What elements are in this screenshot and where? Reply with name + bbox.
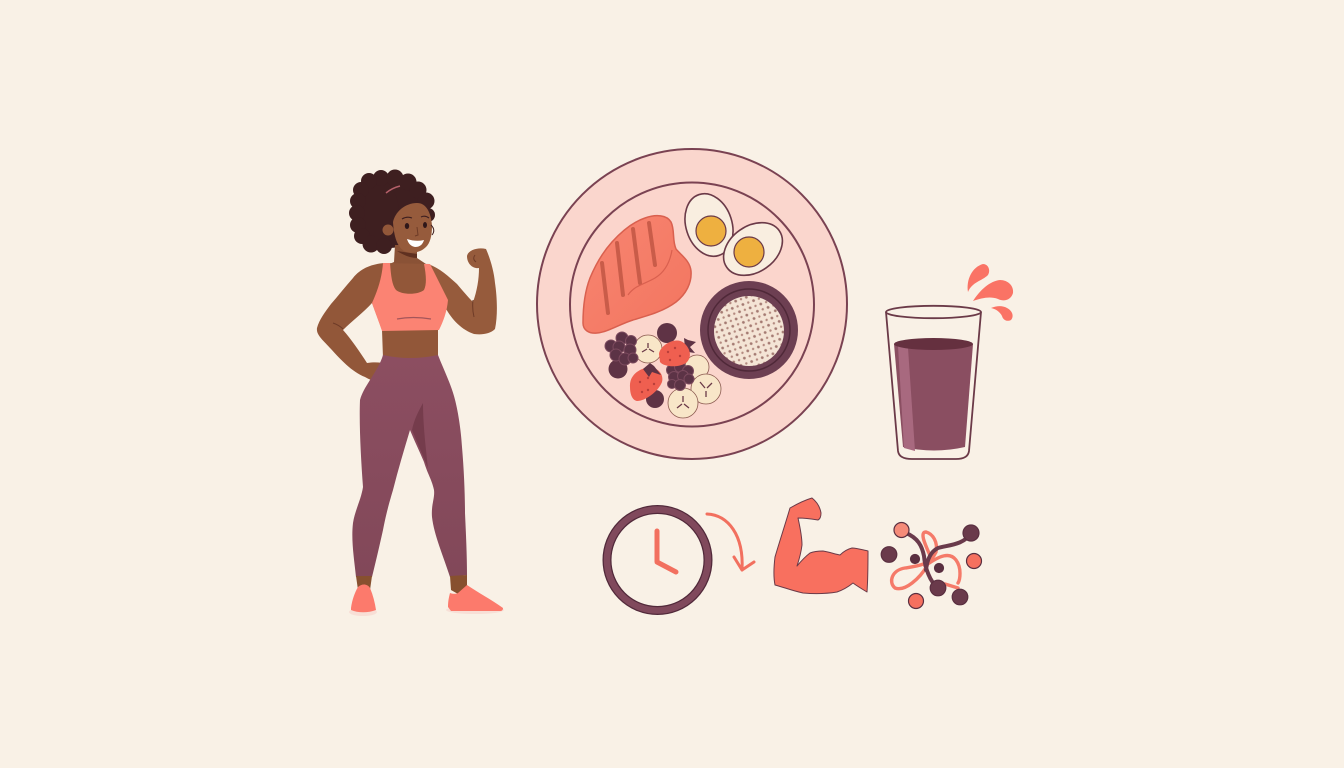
face (393, 203, 432, 253)
left shoe (351, 584, 376, 612)
right arm with raised fist (428, 248, 497, 334)
molecules and amino acid strands (881, 522, 982, 608)
curl (431, 225, 434, 235)
ankles (356, 575, 467, 594)
boiled eggs (677, 187, 792, 286)
clock (607, 510, 708, 610)
juice splash (968, 264, 1013, 321)
hair (349, 170, 435, 254)
clock hands (657, 531, 676, 572)
torso (372, 263, 445, 358)
curved arrow (707, 514, 754, 570)
left arm and hand on hip (317, 263, 397, 383)
arm creases (333, 255, 476, 329)
banana slices (634, 335, 721, 418)
bra seam (397, 318, 431, 319)
grilled chicken (583, 216, 691, 333)
berries and fruit (605, 323, 721, 418)
strawberry upper (659, 338, 696, 366)
plate (537, 149, 847, 459)
glass highlight (898, 346, 915, 451)
ear (382, 224, 394, 236)
neck (380, 245, 432, 268)
blackberry right (666, 362, 694, 390)
eyes and brows (405, 222, 427, 229)
amino acid nodes (881, 522, 982, 608)
dark strands (906, 533, 971, 588)
headband (386, 186, 400, 193)
neck shadow (397, 251, 417, 258)
sports bra (372, 263, 448, 331)
liquid (894, 344, 973, 450)
leggings (352, 355, 467, 577)
leggings shadow (412, 403, 428, 468)
dark berries (608, 323, 677, 408)
woman figure (317, 170, 504, 616)
coral strand (892, 532, 960, 589)
strawberry lower (630, 363, 662, 401)
glass outline (886, 312, 981, 459)
right shoe (448, 585, 503, 611)
blackberry left (605, 332, 638, 365)
smile (407, 239, 424, 247)
grain bowl (700, 281, 798, 379)
juice glass (886, 264, 1013, 459)
nose (415, 227, 418, 236)
liquid surface (894, 338, 973, 350)
shoe shadows (349, 606, 504, 616)
flexed muscle arm (774, 498, 868, 594)
